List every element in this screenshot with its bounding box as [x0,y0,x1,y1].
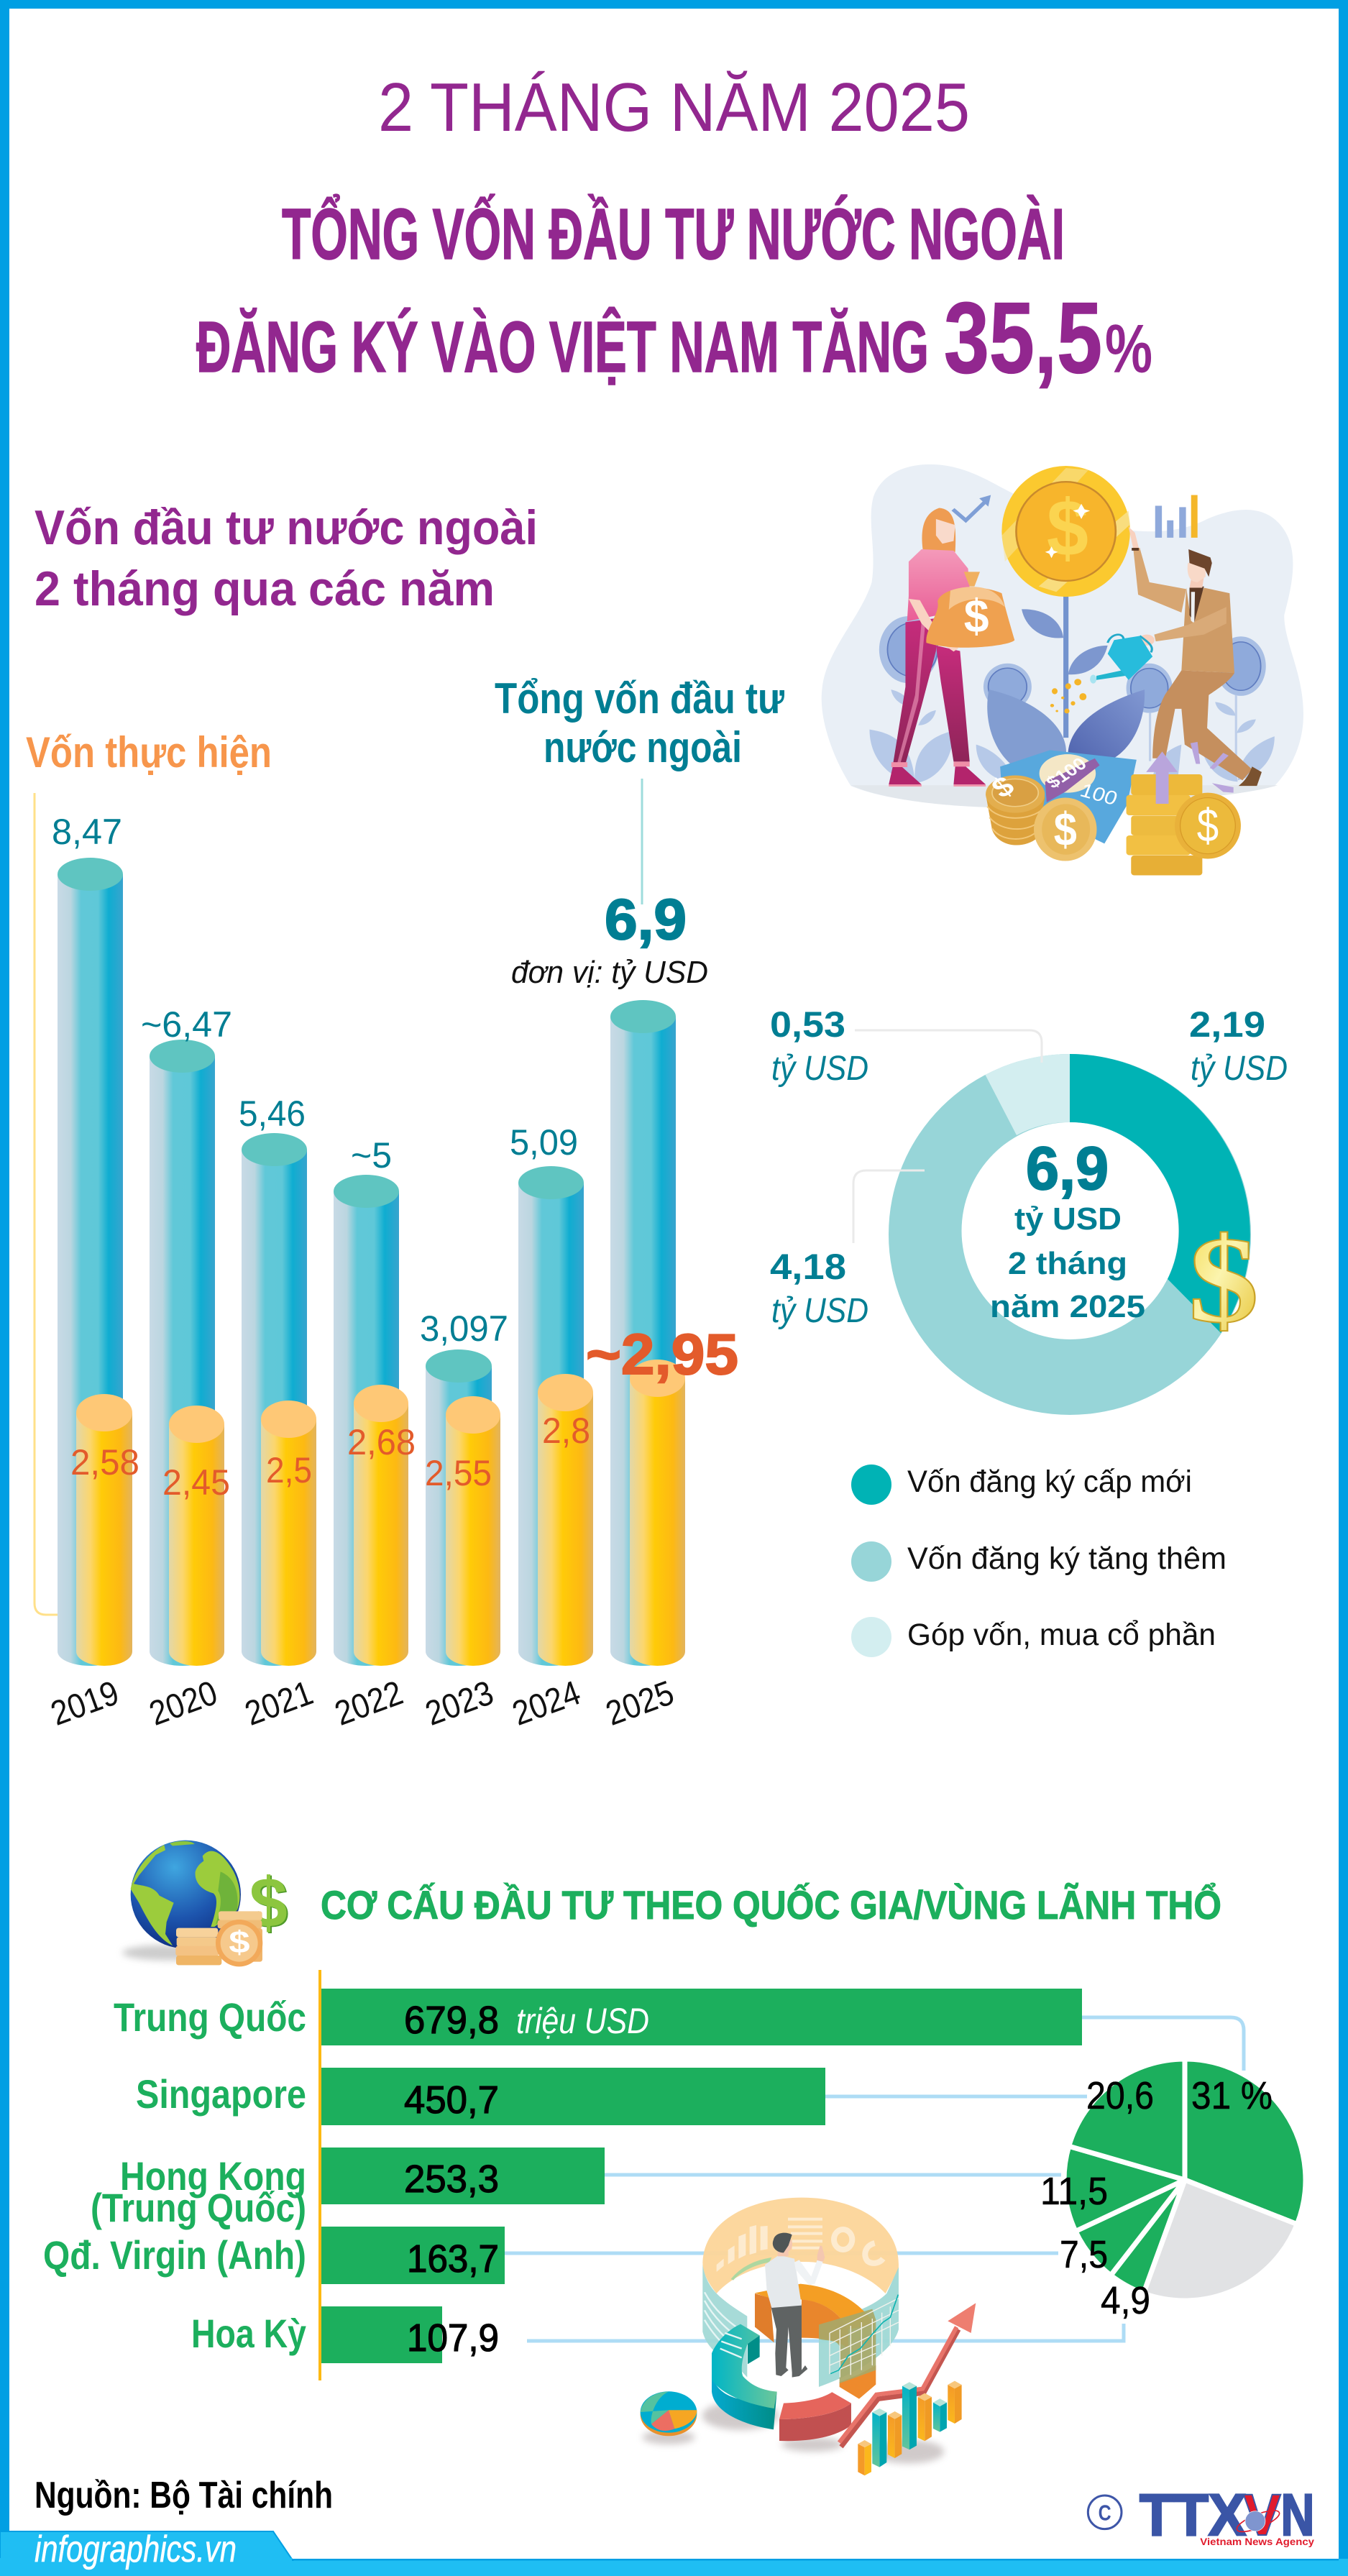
big gold coin [1001,466,1130,597]
x axis years: 2020 [145,1674,222,1733]
data grid panel [819,2295,899,2383]
logo: TTXVN: TTX [1140,2483,1246,2548]
icon: globe with coins [122,1841,289,1966]
coin stack right with arrow: $ [1197,799,1219,851]
donut labels: tỷ USD [1191,1050,1288,1088]
heading: foreign investment over the years: Vốn đầu tư nước ngoài [35,500,538,555]
values: total investment: 8,47 [52,812,122,852]
teal ring [712,2324,777,2429]
x axis years: 2021 [240,1674,318,1733]
values: disbursed capital: 2,8 [542,1411,590,1451]
connector lines [505,2017,1244,2341]
coin stack left: $ [1054,802,1077,855]
icon: globe with coins: $ [251,1864,289,1943]
title: ĐĂNG KÝ VÀO VIỆT NAM TĂNG [196,307,929,388]
big gold coin: $ [1047,483,1088,572]
logo: TTXVN: C [1099,2501,1111,2526]
values: total investment: 5,09 [510,1122,578,1163]
donut chart [889,1054,1251,1415]
pie labels: 20,6 [1086,2074,1154,2117]
logo: TTXVN: Vietnam News Agency [1200,2536,1314,2547]
watering can and drops [1050,635,1152,713]
coin stack left: $ [985,770,1020,804]
x axis years: 2024 [508,1674,585,1733]
values: total investment: 3,097 [420,1308,508,1349]
analyst [765,2233,825,2378]
donut labels: 2,19 [1189,1004,1265,1045]
values: disbursed capital: 2,5 [266,1450,312,1490]
unit label: triệu USD [516,2001,649,2041]
donut labels: 4,18 [770,1247,846,1287]
x axis years [46,1674,679,1733]
banknotes: $100 [1042,754,1091,792]
values: disbursed capital [70,1322,738,1503]
legend: Vốn đăng ký tăng thêm [907,1541,1227,1576]
donut labels: 0,53 [770,1004,845,1045]
logo: TTXVN [1088,2483,1314,2548]
bar labels: Qđ. Virgin (Anh) [43,2232,306,2278]
label: total foreign investment: nước ngoài [544,723,742,771]
logo: TTXVN: N [1281,2483,1314,2548]
label: total foreign investment: Tổng vốn đầu tư [495,674,784,723]
value: 2025 total and unit [511,887,708,990]
donut centre text [990,1135,1145,1324]
money bag [926,572,1014,648]
bar chart: gold cylinders disbursed capital [76,1360,685,1666]
values: total investment: 5,46 [239,1094,306,1134]
values: disbursed capital: 2,55 [425,1453,492,1493]
value: 2025 total and unit: 6,9 [605,887,687,951]
bar values: 163,7 [407,2237,499,2281]
donut centre text: 2 tháng [1008,1246,1127,1281]
coin stack left [985,770,1097,861]
bar values: 253,3 [404,2158,499,2201]
pie labels [1040,2074,1273,2322]
donut labels: tỷ USD [771,1050,868,1088]
title: % [1105,311,1152,388]
label: disbursed capital: Vốn thực hiện [26,728,272,776]
x axis years: 2019 [46,1674,124,1733]
donut centre text: 6,9 [1026,1135,1109,1202]
values: disbursed capital: 2,58 [70,1442,139,1482]
bar values: 679,8 [404,1999,499,2042]
x axis years: 2023 [421,1674,498,1733]
source: Nguồn: Bộ Tài chính [35,2475,333,2516]
bar labels: Singapore [136,2071,306,2117]
bar values: 107,9 [407,2316,499,2360]
pie labels: 7,5 [1060,2233,1108,2276]
icon: gold dollar: $ [1188,1212,1259,1349]
plant [987,595,1145,769]
pie labels: 31 % [1191,2074,1273,2117]
values: disbursed capital: 2,45 [162,1462,230,1503]
icon: globe with coins: $ [229,1926,250,1961]
values: total investment: ~6,47 [141,1004,232,1045]
donut centre text: tỷ USD [1014,1201,1122,1237]
pie labels: 11,5 [1040,2170,1108,2213]
title: 2 THÁNG NĂM 2025 [378,69,970,146]
heading: investment structure: CƠ CẤU ĐẦU TƯ THEO QUỐC GIA/VÙNG LÃNH THỔ [321,1882,1221,1928]
legend [851,1465,1227,1657]
coin stack right with arrow [1127,742,1241,875]
logo: TTXVN: V [1243,2483,1281,2548]
bar values: 450,7 [404,2078,499,2122]
footer band [0,2531,1348,2576]
donut labels: tỷ USD [771,1292,868,1330]
pie chart [1064,2059,1306,2301]
legend: Vốn đăng ký cấp mới [907,1465,1192,1499]
red ring segment [779,2392,851,2441]
isometric bars [858,2381,962,2475]
bar labels: Trung Quốc [114,1994,306,2040]
title: 35,5 [944,281,1102,394]
rising arrow [839,2303,976,2447]
illustration: money tree with two people [822,464,1303,875]
bar values [404,1999,499,2360]
money bag: $ [964,590,989,642]
pie labels: 4,9 [1101,2279,1150,2322]
horizontal bars [321,1989,1082,2363]
donut labels [770,1004,1288,1330]
donut centre text: năm 2025 [990,1289,1145,1324]
bar labels: Hoa Kỳ [191,2311,306,2356]
x axis years: 2022 [330,1674,408,1733]
label: total foreign investment [495,674,784,771]
bar labels: Hong Kong [120,2153,306,2199]
heading: foreign investment over the years [35,500,538,616]
values: total investment: ~5 [351,1135,392,1175]
values: disbursed capital: 2,68 [347,1422,416,1462]
illustration: analyst with isometric charts [641,2198,976,2475]
value: 2025 total and unit: đơn vị: tỷ USD [511,955,708,990]
woman [889,508,986,787]
heading: foreign investment over the years: 2 tháng qua các năm [35,562,495,616]
x axis years: 2025 [601,1674,679,1733]
values: total investment [52,812,578,1349]
bar labels: (Trung Quốc) [91,2185,306,2230]
website label: infographics.vn [35,2529,237,2570]
banknotes: 100 [1077,780,1120,810]
legend: Góp vốn, mua cổ phần [907,1618,1216,1652]
icon: globe with coins: $ [249,1863,288,1942]
title [196,69,1152,394]
man [1129,527,1262,786]
values: disbursed capital: ~2,95 [586,1322,738,1386]
bar chart: blue cylinders total investment [58,858,676,1666]
banknotes [1000,750,1137,843]
mini pie [641,2391,697,2436]
bar labels [43,1994,306,2356]
donut leader lines [853,1030,1042,1243]
leader lines [35,779,642,1615]
